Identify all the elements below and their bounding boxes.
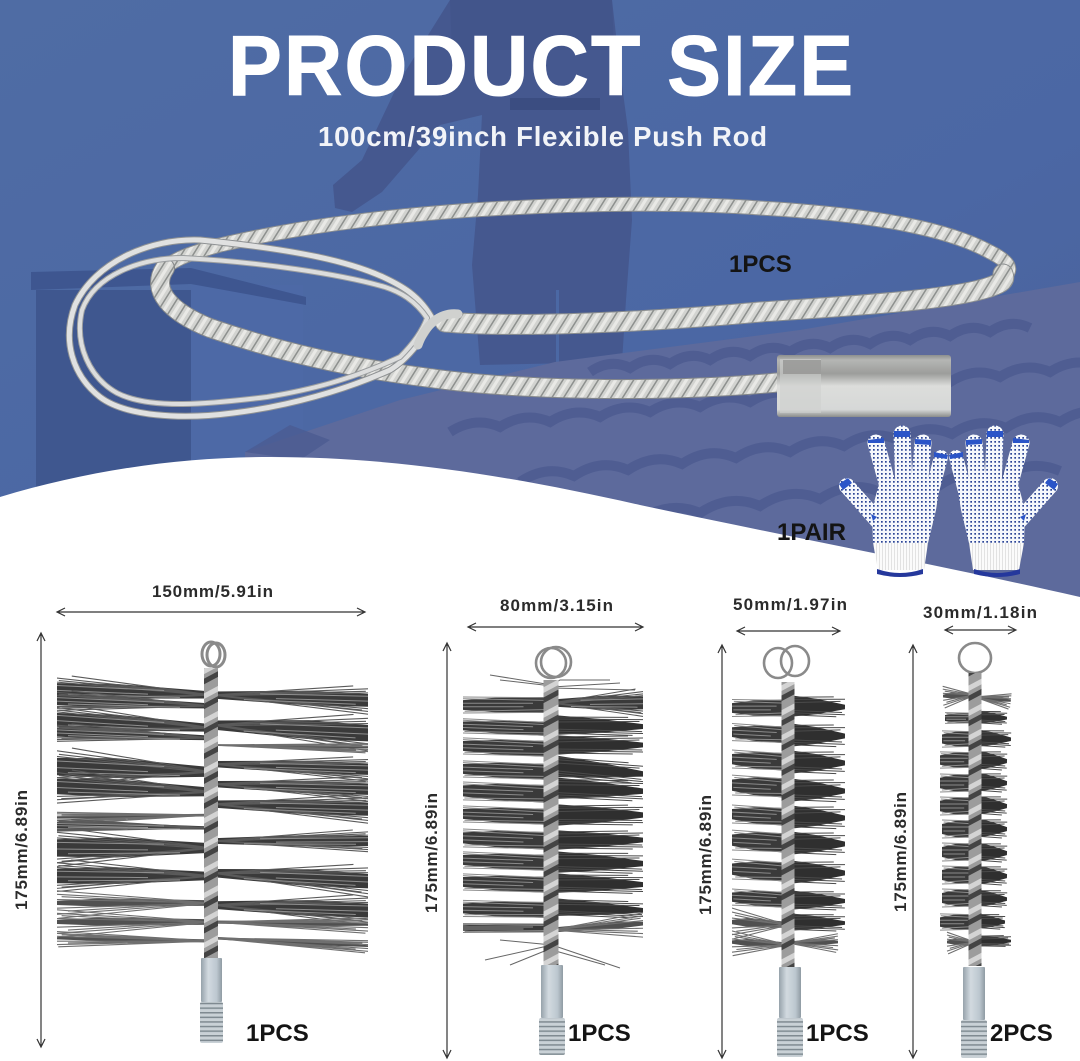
- ring: [536, 647, 571, 678]
- twisted stem: [968, 673, 982, 966]
- quantity: 2PCS: [990, 1020, 1053, 1047]
- height dimension: 175mm/6.89in: [696, 795, 715, 915]
- ring: [202, 642, 225, 667]
- height dimension: [891, 645, 917, 1058]
- twisted stem: [204, 668, 218, 958]
- width dimension: [468, 596, 643, 631]
- wire loop: [69, 240, 433, 416]
- bristles: [730, 695, 845, 959]
- right glove: [949, 431, 1058, 577]
- brush 2: 80mm: [422, 596, 648, 1058]
- width dimension: 150mm/5.91in: [152, 582, 273, 601]
- width dimension: [923, 603, 1037, 634]
- brush 4: 30mm: [891, 603, 1053, 1058]
- bristles: [51, 675, 373, 953]
- bristles: [939, 685, 1012, 954]
- twisted stem: [782, 682, 794, 968]
- brush 3: 50mm: [696, 595, 869, 1058]
- roof tiles: [245, 282, 1080, 600]
- gloves: [839, 431, 1058, 577]
- worker silhouette: [333, 0, 632, 365]
- quantity: 1PCS: [246, 1020, 309, 1047]
- width dimension: [733, 595, 847, 635]
- double ring: [764, 646, 809, 678]
- width dimension: 50mm/1.97in: [733, 595, 847, 614]
- height dimension: [12, 633, 45, 1047]
- threaded stud: [777, 967, 803, 1057]
- quantity: 1PCS: [568, 1020, 631, 1047]
- front rope strand: [160, 268, 782, 389]
- threaded ferrule: [777, 355, 951, 417]
- height dimension: 175mm/6.89in: [422, 793, 441, 913]
- width dimension: [57, 582, 365, 616]
- white curved wave: [0, 457, 1080, 1061]
- chimney: [31, 268, 306, 500]
- threaded stud: [961, 967, 987, 1058]
- upper rope strand: [165, 204, 1009, 280]
- threaded stud: [200, 958, 223, 1043]
- height dimension: 175mm/6.89in: [891, 792, 910, 912]
- ring: [959, 643, 991, 673]
- subtitle: 100cm/39inch Flexible Push Rod: [318, 121, 767, 152]
- bristles: [457, 675, 648, 968]
- title: PRODUCT SIZE: [228, 18, 853, 113]
- brush 1: 150mm: [12, 582, 373, 1047]
- rod knot: [418, 314, 458, 345]
- height dimension: [422, 643, 451, 1058]
- panel: blue rooftop photo background: [0, 0, 1080, 600]
- width dimension: 80mm/3.15in: [500, 596, 613, 615]
- label: glove quantity: 1PAIR: [777, 519, 846, 546]
- lower rope strand from knot: [445, 274, 1004, 324]
- left glove: [839, 431, 948, 577]
- quantity: 1PCS: [806, 1020, 869, 1047]
- height dimension: [696, 645, 726, 1058]
- width dimension: 30mm/1.18in: [923, 603, 1037, 622]
- label: rod quantity: 1PCS: [729, 251, 792, 278]
- threaded stud: [539, 965, 565, 1055]
- height dimension: 175mm/6.89in: [12, 790, 31, 910]
- twisted stem: [544, 680, 558, 966]
- flexible push rod: [69, 204, 1009, 416]
